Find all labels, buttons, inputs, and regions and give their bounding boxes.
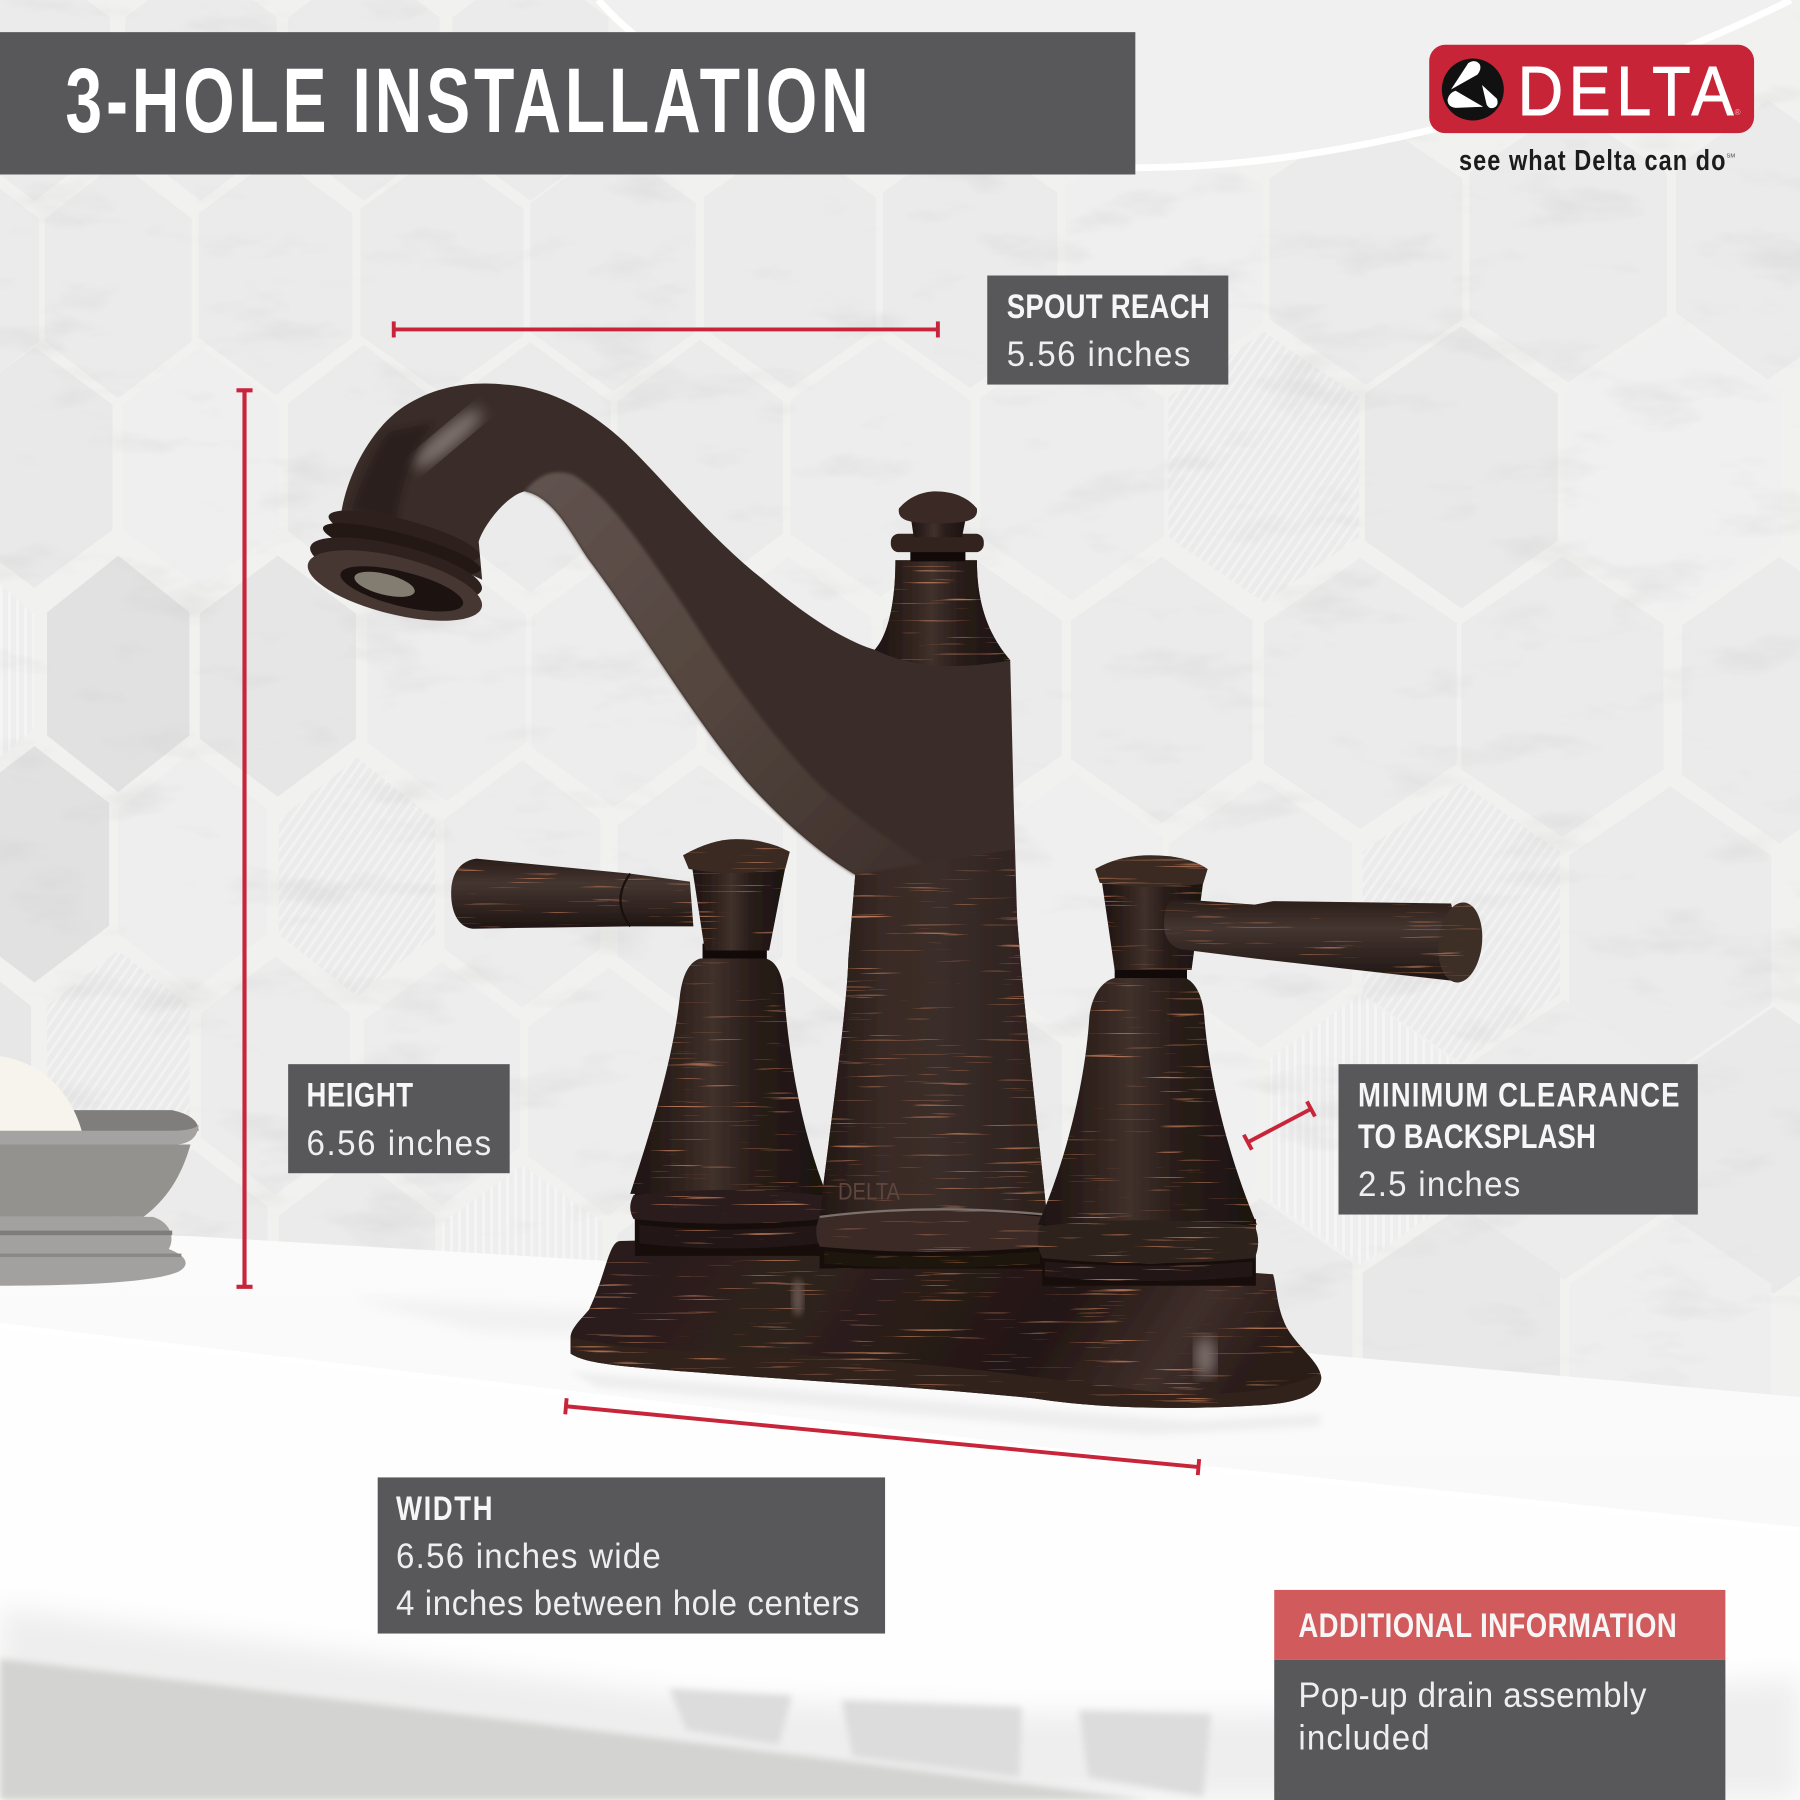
Delta logo: see what Delta can do [1459,144,1725,176]
label: height: 6.56 inches [307,1124,491,1163]
Delta logo [1429,45,1754,176]
title banner [0,32,1135,174]
dimension line: spout reach [394,321,938,338]
Delta logo: DELTA [1518,53,1734,131]
dimension line: width [565,1398,1199,1475]
Delta logo: SM [1727,153,1735,159]
label: minimum clearance: 2.5 inches [1358,1165,1520,1204]
post top knob [891,491,984,561]
aerator nozzle [301,500,489,635]
faucet [301,384,1486,1408]
title banner: 3-HOLE INSTALLATION [65,49,869,152]
label: width [378,1477,885,1634]
center body rings [816,1209,1047,1268]
label: spout reach [987,276,1228,385]
dimension line: backsplash clearance [1244,1101,1315,1150]
label: spout reach: 5.56 inches [1007,335,1190,374]
panel: additional information: included [1298,1718,1430,1758]
mirror at top of wall [598,0,1791,168]
panel: additional information: Pop-up drain assembly [1298,1676,1647,1715]
panel: additional information [1274,1590,1725,1800]
right handle [1038,855,1486,1286]
soap dish with soap [0,1056,199,1286]
Delta logo: ® [1735,108,1741,117]
faucet deck base [571,1240,1321,1408]
label: height: HEIGHT [307,1076,413,1114]
panel: additional information: ADDITIONAL INFORMATION [1298,1606,1677,1645]
label: minimum clearance [1339,1064,1698,1215]
label: width: WIDTH [396,1489,492,1528]
dimension line: height [236,390,253,1287]
label: minimum clearance: TO BACKSPLASH [1358,1117,1596,1156]
label: width: 4 inches between hole centers [396,1584,859,1623]
label: height [288,1064,510,1173]
label: width: 6.56 inches wide [396,1537,661,1576]
countertop [0,1229,1800,1800]
label: minimum clearance: MINIMUM CLEARANCE [1358,1076,1679,1114]
label: spout reach: SPOUT REACH [1007,287,1210,326]
left handle [451,839,827,1256]
cast logo on faucet body: DELTA [838,1179,901,1206]
spout and body [341,384,1047,1216]
